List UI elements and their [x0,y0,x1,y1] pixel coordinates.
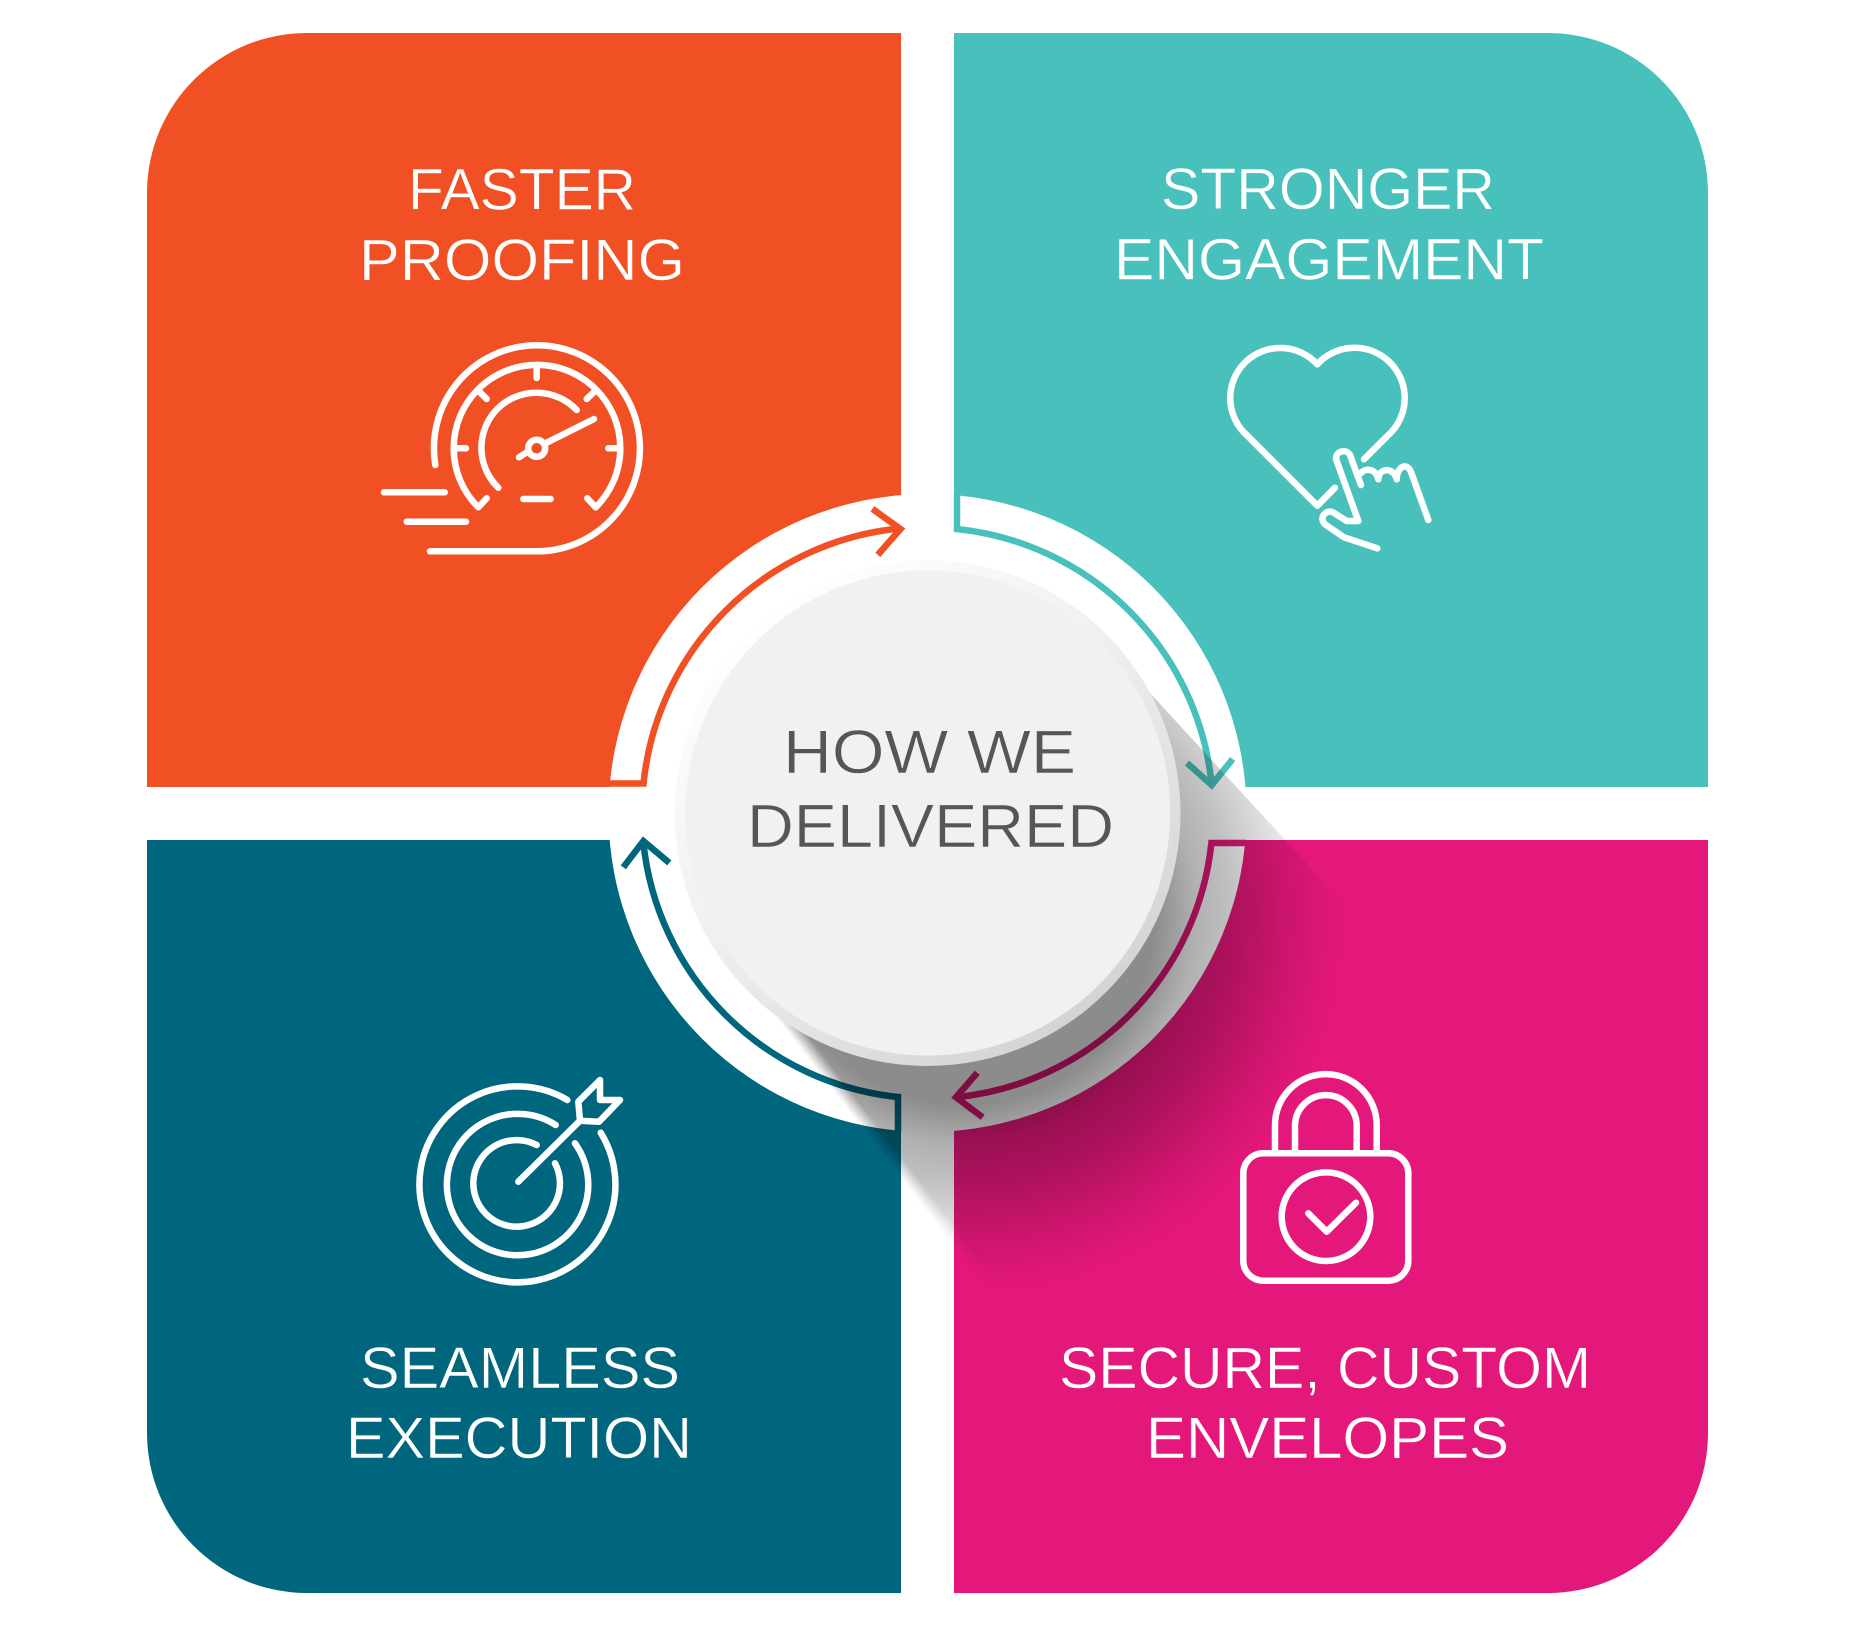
heading: faster proofing [359,158,685,293]
arrow: orange cycle arc [608,509,900,784]
icon: speedometer [384,345,640,551]
heading: seamless execution: SEAMLESS [360,1336,680,1401]
heading: secure custom envelopes [1059,1336,1591,1471]
icon: heart with pointing hand [1230,348,1428,548]
center heading: DELIVERED [747,792,1114,860]
center heading [747,718,1114,860]
central white ring cut-out [600,480,1255,1150]
heading: stronger engagement [1114,157,1544,292]
arrow: magenta cycle arc [956,843,1246,1117]
heading: seamless execution [346,1336,692,1471]
panel: seamless execution background [147,840,901,1593]
arrow: teal cycle arc [957,494,1233,785]
heading: secure custom envelopes: ENVELOPES [1146,1406,1509,1471]
heading: stronger engagement: ENGAGEMENT [1114,228,1544,292]
heading: stronger engagement: STRONGER [1161,157,1495,222]
panel: stronger engagement background [954,33,1708,787]
heading: seamless execution: EXECUTION [346,1406,692,1471]
center heading: HOW WE [783,718,1076,786]
heading: faster proofing: PROOFING [359,228,685,293]
heading: faster proofing: FASTER [408,158,636,222]
central disc [674,560,1180,1066]
icon: padlock with check [1243,1074,1408,1281]
arrow: navy cycle arc [623,841,898,1132]
icon: target with arrow [419,1080,620,1282]
panel: secure custom envelopes background [954,840,1708,1593]
panel: faster proofing background [147,33,901,787]
long drop shadow of central disc [778,694,1322,1272]
heading: secure custom envelopes: SECURE, CUSTOM [1059,1336,1591,1401]
